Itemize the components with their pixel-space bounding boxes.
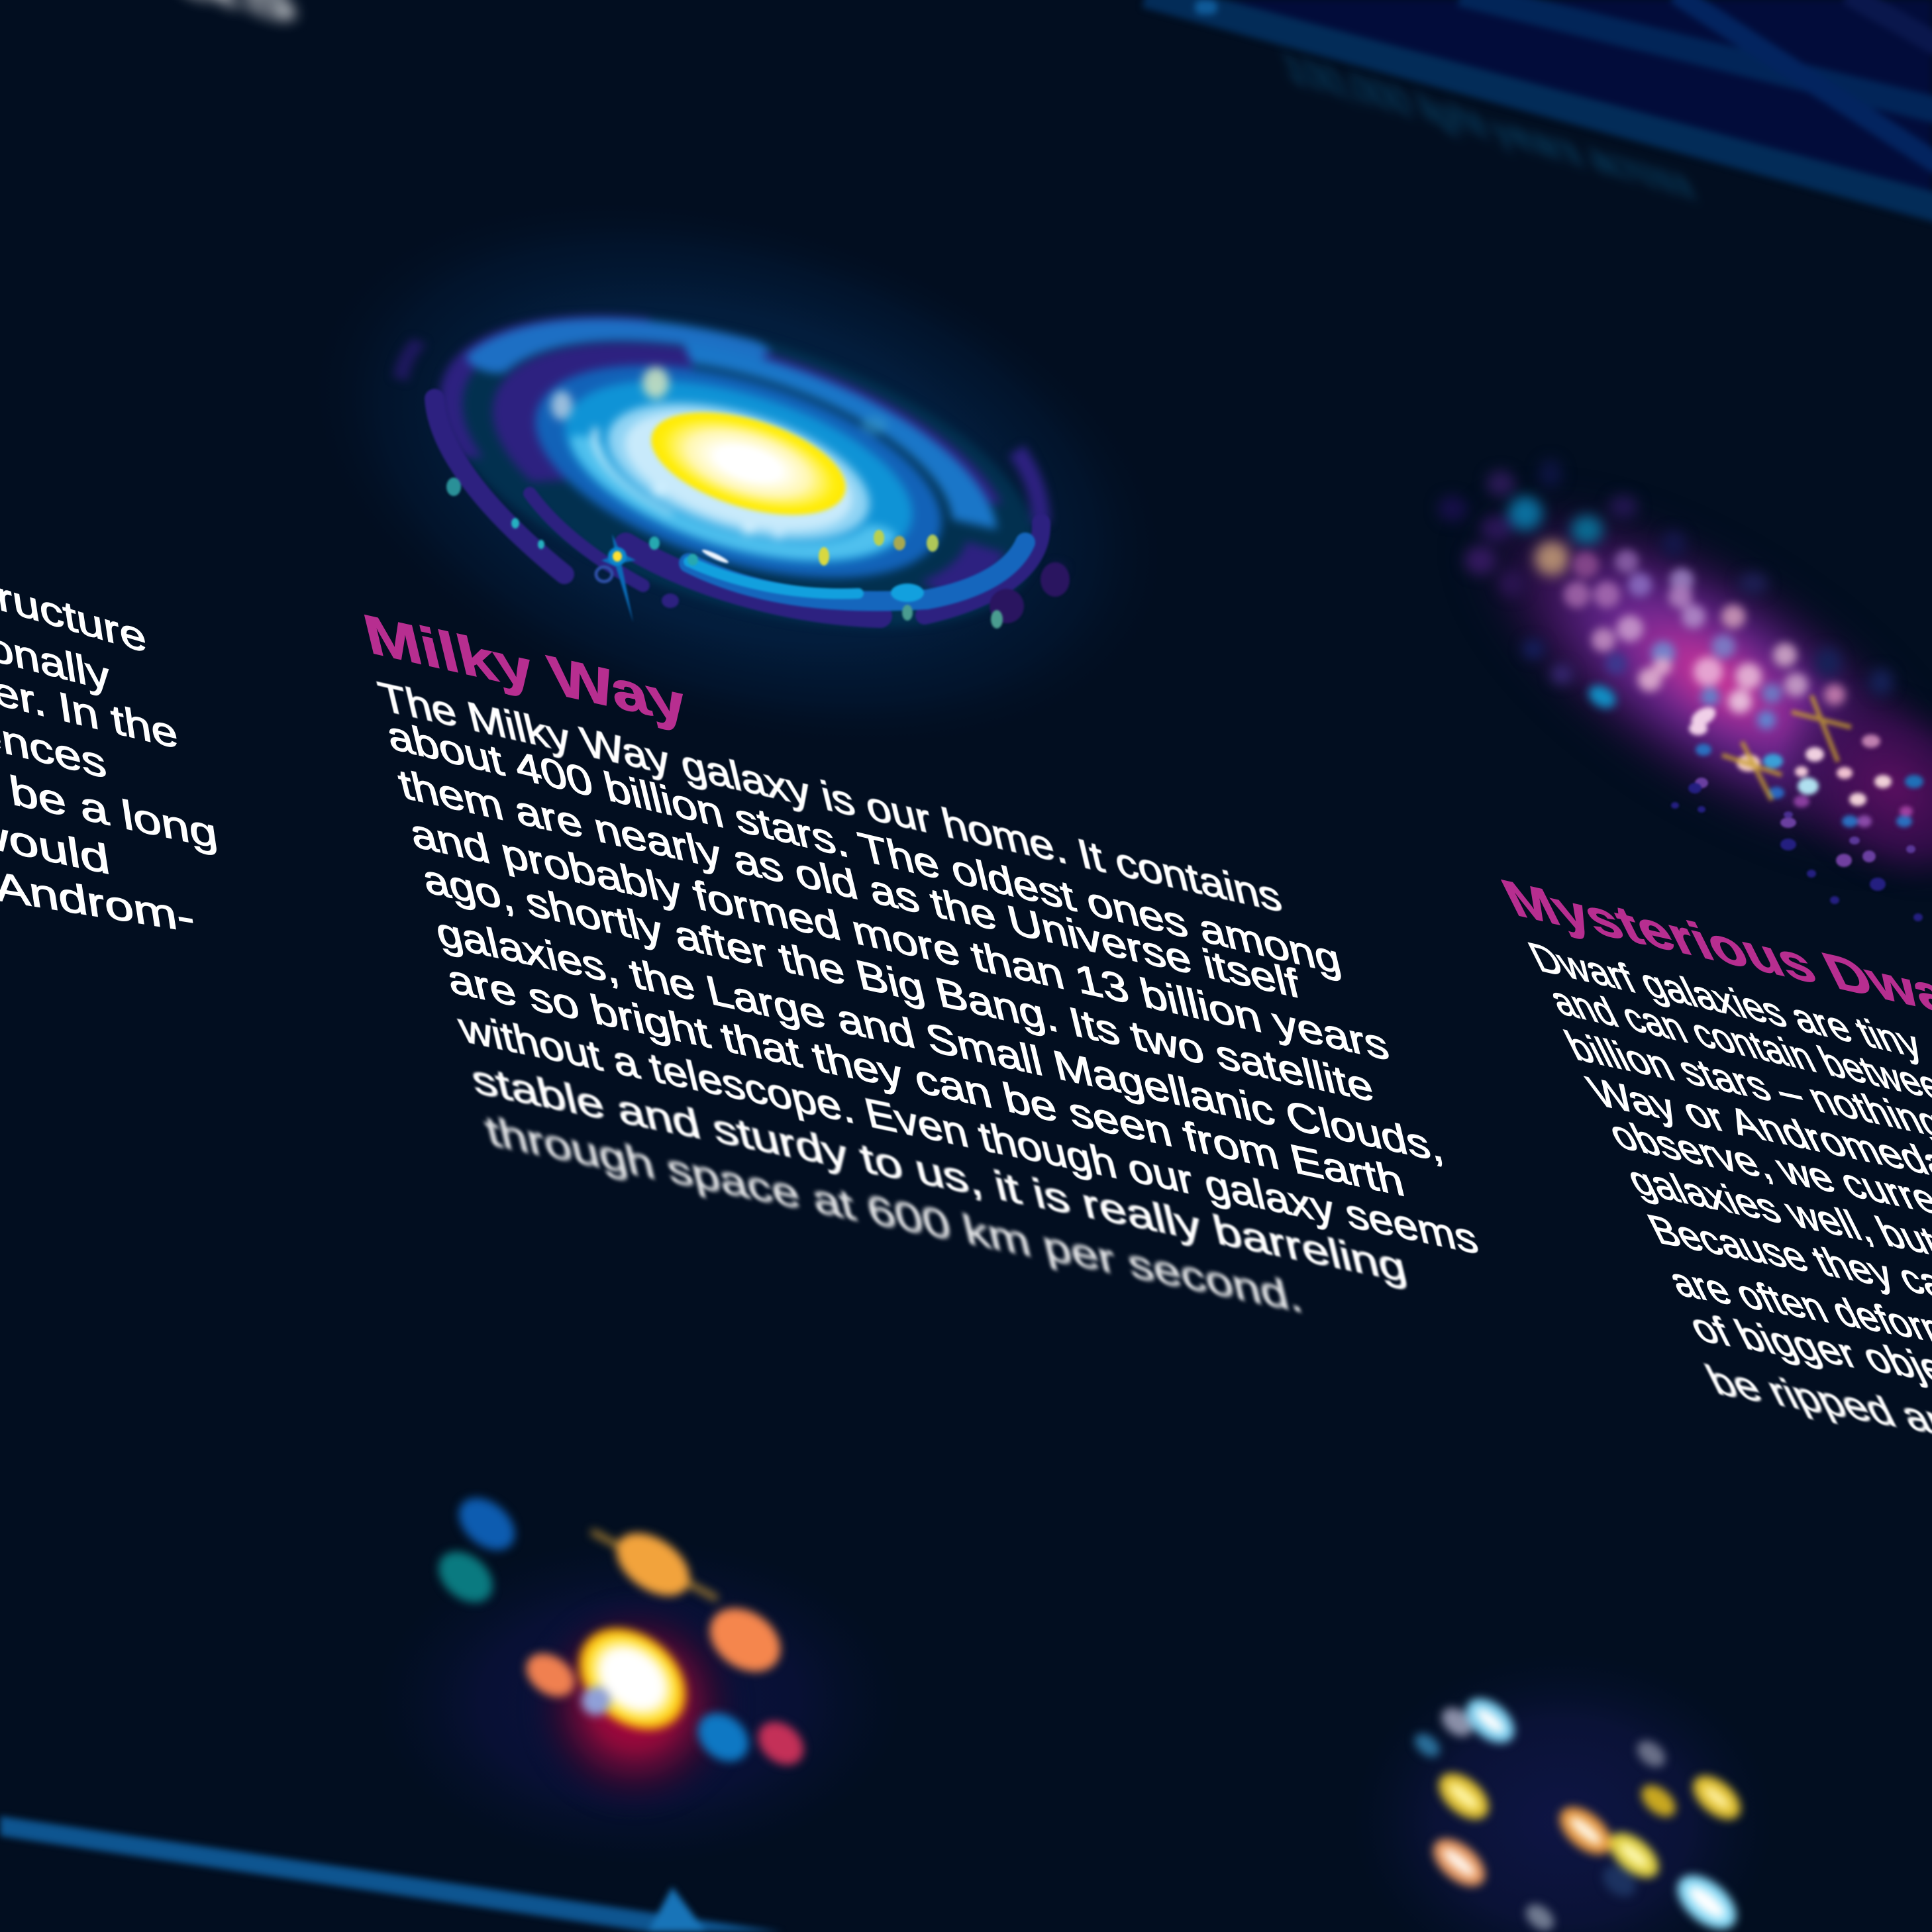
planet: coral [697, 1595, 793, 1685]
galaxy inner disc and blurred arms [359, 225, 1118, 719]
text block: Milky Way description: galaxies, the Large and Small Magellanic Clouds, [431, 909, 1448, 1172]
planet: red [750, 1713, 812, 1774]
galaxy glow [232, 95, 1245, 852]
text block: Milky Way description: about 400 billion stars. The oldest ones among [382, 712, 1345, 984]
sun [559, 1607, 706, 1751]
dwarf galaxy core stars [1564, 550, 1845, 729]
planet: teal [429, 1541, 503, 1613]
illustration: star cluster [1351, 1652, 1775, 1932]
text block: dwarf galaxies description [1521, 933, 1932, 1456]
top-right scale panel [1146, 0, 1932, 214]
planet: blue [688, 1703, 758, 1772]
text block: Milky Way description: are so bright that they can be seen from Earth [442, 956, 1409, 1205]
solar system navy halo [358, 1523, 927, 1881]
blurred scale caption: 100,000 light-years across [1278, 46, 1698, 207]
text block: Milky Way description: ago, shortly after the Big Bang. Its two satellite [418, 856, 1378, 1111]
planet: small lavender [582, 1686, 611, 1715]
galaxy foreground star with spikes [601, 534, 636, 623]
cluster navy halo [1351, 1652, 1775, 1932]
galaxy far-side outer arc [1017, 450, 1041, 523]
planet: small coral [518, 1645, 583, 1705]
illustration: solar system [358, 1488, 927, 1881]
dwarf galaxy far stars [1438, 459, 1893, 695]
dwarf galaxy gold cross stars [1722, 695, 1851, 800]
sun red glow [482, 1551, 790, 1860]
text block: left column fragment: be a long [7, 768, 221, 858]
dwarf galaxy outlying dots [1671, 778, 1923, 921]
bottom timeline axis with marker [0, 1816, 783, 1932]
text block: Milky Way description [374, 674, 1482, 1322]
cluster stars [1410, 1690, 1749, 1932]
text block: Milky Way description: The Milky Way galaxy is our home. It contains [374, 674, 1286, 921]
text block: Milky Way description: without a telescope. Even though our galaxy seems [454, 1005, 1482, 1263]
dwarf galaxy lower magenta haze [1738, 642, 1932, 935]
text block: Milky Way description: stable and sturdy to us, it is really barreling [467, 1056, 1411, 1292]
planet: dark blue [449, 1488, 525, 1560]
text block: Milky Way description: and probably formed more than 13 billion years [405, 810, 1394, 1070]
heading: Mysterious Dwarf: Mysterious Dwarf [1492, 868, 1932, 1035]
planets and sun [429, 1488, 812, 1774]
dwarf galaxy near stars [1688, 695, 1923, 827]
planet: ringed orange [591, 1520, 717, 1609]
text block: left column fragment [0, 573, 221, 941]
illustration: dwarf galaxy [1408, 423, 1932, 935]
galaxy core [639, 392, 858, 535]
galaxy near arms [434, 399, 1070, 629]
text block: Milky Way description: them are nearly as old as the Universe itself [394, 761, 1305, 1007]
galaxy bright star clumps [551, 367, 888, 540]
illustration: Milky Way galaxy [232, 95, 1245, 852]
text block: Milky Way description: through space at 600 km per second. [481, 1108, 1307, 1322]
heading: Milky Way: Milky Way [358, 603, 693, 737]
dwarf galaxy magenta glow [1408, 423, 1932, 935]
